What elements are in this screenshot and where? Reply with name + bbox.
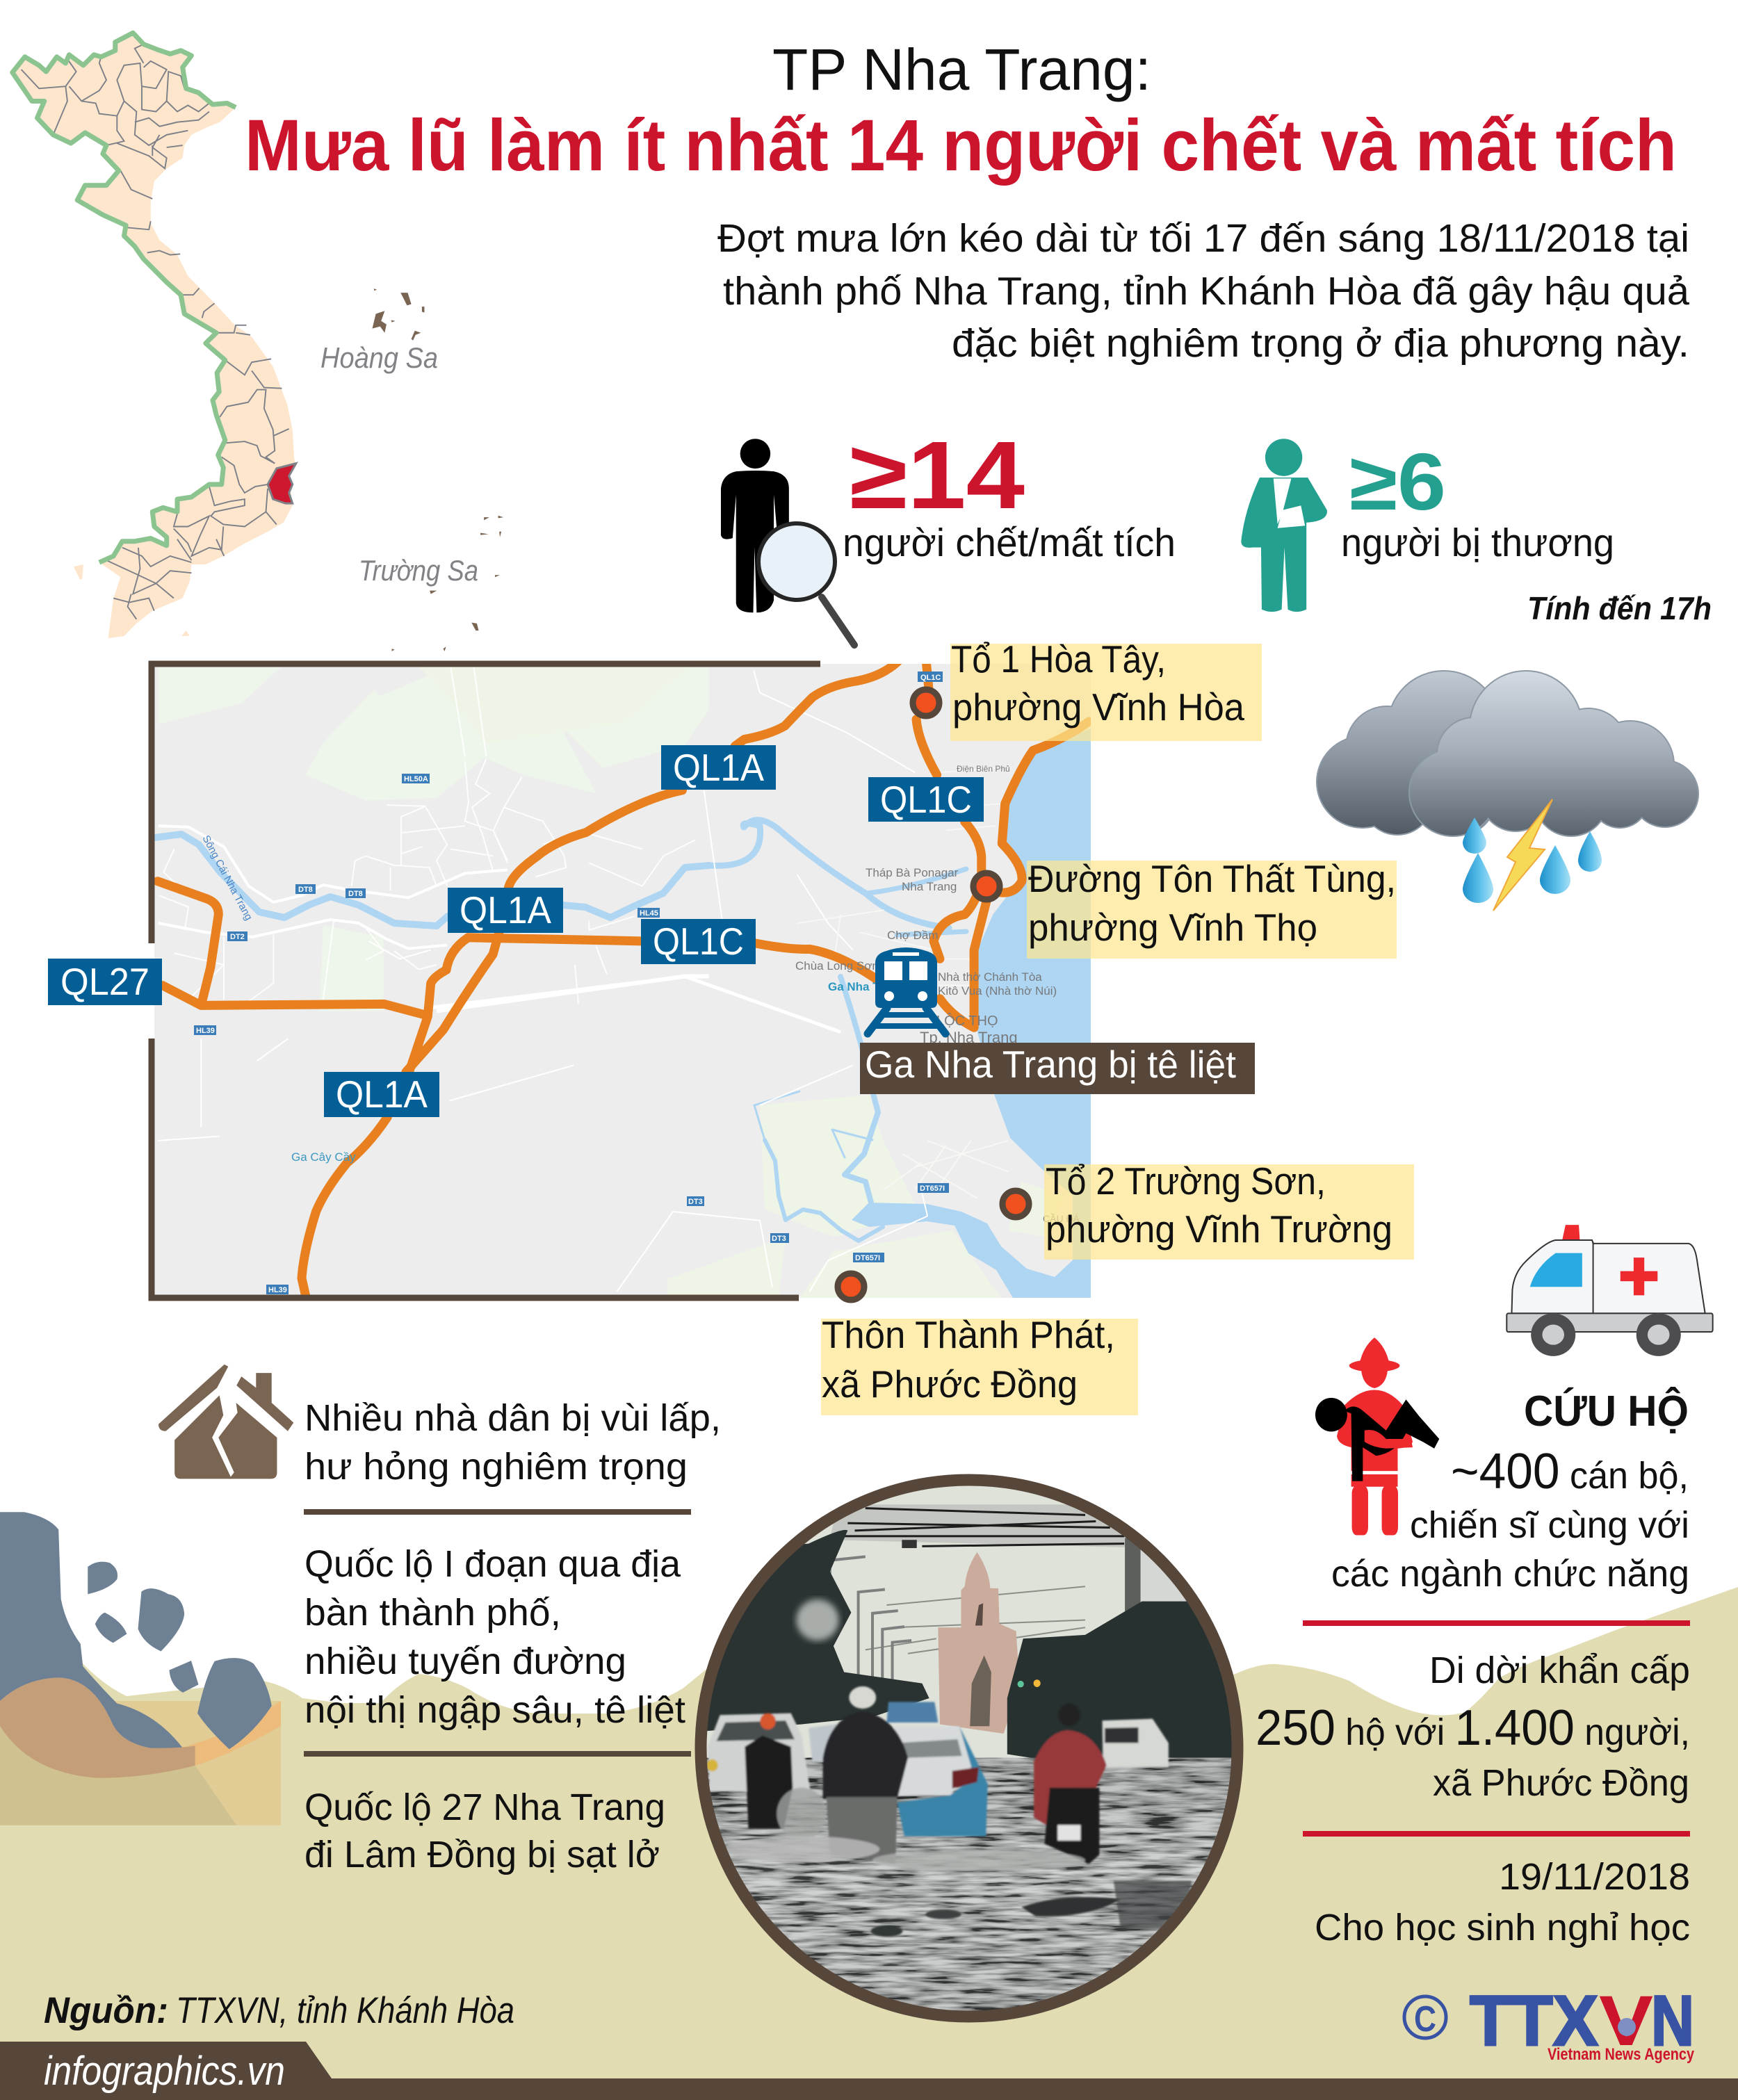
damage: houses: hư hỏng nghiêm trọng	[304, 1446, 688, 1488]
rescue text: chiến sĩ cùng với	[1410, 1504, 1689, 1546]
school closure text: 19/11/2018	[1499, 1856, 1690, 1898]
label: QL1C north: QL1C	[880, 778, 972, 821]
centre rider	[823, 1711, 908, 1799]
icon: firefighter carrying a victim	[1315, 1337, 1439, 1535]
stat: injured: ≥6	[1349, 437, 1446, 527]
damage: landslide: đi Lâm Đồng bị sạt lở	[304, 1834, 660, 1875]
stat: dead or missing	[843, 422, 1176, 565]
tower	[938, 1552, 1020, 1734]
background hill	[0, 1587, 1738, 2100]
callout: Phuoc Dong	[821, 1313, 1138, 1415]
road badges and small labels: Tháp Bà Ponagar	[866, 866, 959, 879]
Truong Sa islands	[392, 516, 503, 651]
damage: roads: bàn thành phố,	[304, 1592, 561, 1634]
road badges and small labels: Sông Cái Nha Trang	[200, 833, 254, 922]
evacuation text	[1256, 1650, 1690, 1804]
pin: Vinh Hoa	[913, 690, 939, 716]
label: QL1A north: QL1A	[673, 746, 764, 789]
label: QL27: QL27	[60, 960, 149, 1003]
road badges and small labels: Ga Cây Cầy	[291, 1150, 356, 1164]
road badges and small labels: Chợ Đầm	[887, 929, 939, 942]
rivers	[154, 820, 966, 1241]
source: TTXVN, tỉnh Khánh Hòa	[176, 1990, 514, 2031]
icon: ambulance	[1506, 1225, 1713, 1356]
damage: roads: nhiều tuyến đường	[304, 1641, 626, 1682]
road badges and small labels: Tp. Nha Trang	[920, 1029, 1018, 1046]
front cloud	[1410, 671, 1698, 836]
wires	[830, 1504, 1126, 1547]
road badges and small labels: Kitô Vua (Nhà thờ Núi)	[938, 984, 1057, 998]
pin: Vinh Truong	[1002, 1191, 1029, 1217]
pin: Phuoc Dong	[838, 1273, 864, 1300]
road badges and small labels: DT657I	[855, 1254, 880, 1262]
website: infographics.vn	[44, 2049, 285, 2094]
logo: TTXVN: Vietnam News Agency	[1548, 2045, 1695, 2064]
road badges and small labels: Điện Biên Phủ	[957, 764, 1010, 774]
road badges and small labels: Chùa Long Sơn	[795, 959, 879, 972]
evacuation text: 250 hộ với 1.400 người,	[1256, 1700, 1690, 1756]
stat: dead or missing: người chết/mất tích	[843, 521, 1176, 565]
damage: houses: Nhiều nhà dân bị vùi lấp,	[304, 1397, 721, 1439]
icon: storm cloud	[1317, 671, 1698, 911]
road badges and small labels: LỘC THỌ	[936, 1013, 998, 1029]
road badges and small labels: DT2	[230, 933, 245, 941]
lightning bolt	[1493, 799, 1552, 911]
sea	[852, 729, 1091, 1298]
title line 1: TP Nha Trang:	[772, 37, 1151, 102]
icon: injured person	[1241, 439, 1327, 612]
white streets	[158, 671, 1008, 1292]
label: Truong Sa: Trường Sa	[359, 554, 478, 587]
rescue text: các ngành chức năng	[1331, 1553, 1689, 1595]
rescue text	[1331, 1444, 1689, 1595]
damage: roads: Quốc lộ I đoạn qua địa	[304, 1543, 681, 1585]
damage: roads: nội thị ngập sâu, tê liệt	[304, 1689, 685, 1731]
stat: injured	[1341, 437, 1614, 565]
school closure text: Cho học sinh nghỉ học	[1315, 1907, 1690, 1948]
islands near coast	[74, 564, 190, 636]
left rider	[745, 1736, 793, 1829]
evacuation text: Di dời khẩn cấp	[1429, 1650, 1690, 1691]
label: Ga Nha Trang: Ga Nha Trang bị tê liệt	[865, 1043, 1236, 1086]
icon: train	[868, 947, 945, 1034]
title line 2: Mưa lũ làm ít nhất 14 người chết và mất tích	[245, 105, 1677, 186]
Hoang Sa islands	[373, 288, 424, 341]
road badges and small labels: Ga Nha Trang	[828, 980, 905, 993]
trees left	[695, 1530, 929, 1732]
callout: Ton That Tung: phường Vĩnh Thọ	[1028, 906, 1317, 949]
intro text	[717, 216, 1689, 366]
photo ring	[701, 1480, 1237, 2017]
intro text: đặc biệt nghiêm trọng ở địa phương này.	[952, 321, 1689, 366]
back cloud	[1317, 671, 1500, 834]
logo: copyright mark	[1404, 1996, 1446, 2040]
road badges and small labels: DT3	[772, 1235, 786, 1243]
callout: Ton That Tung	[1027, 857, 1397, 959]
road badges and small labels: Nha Trang	[902, 880, 957, 893]
label: QL1C centre: QL1C	[653, 920, 744, 963]
callout: Truong Son: Tổ 2 Trường Sơn,	[1046, 1159, 1326, 1203]
road badges and small labels: CẦU ĐÁ	[1043, 1213, 1080, 1224]
roads	[158, 662, 1089, 1301]
callout: Phuoc Dong: xã Phước Đồng	[822, 1362, 1078, 1406]
panel: damage list	[304, 1397, 721, 1875]
photo: flooded street	[695, 1460, 1251, 2044]
road badges and small labels: DT8	[298, 886, 313, 894]
panel: flood map	[48, 637, 1414, 1415]
green areas south	[417, 664, 1064, 1298]
label: QL1A south: QL1A	[336, 1073, 428, 1116]
label: Hoang Sa: Hoàng Sa	[320, 341, 438, 374]
callout: Truong Son: phường Vĩnh Trường	[1046, 1207, 1392, 1251]
logo: TTXVN: TTX	[1470, 1981, 1598, 2060]
road badges and small labels: HL39	[268, 1286, 287, 1294]
road badges and small labels: DT3	[688, 1198, 703, 1206]
panel: rescue	[1256, 1387, 1690, 1948]
illustration: landslide rocks	[0, 1512, 281, 1825]
source	[44, 1990, 514, 2031]
province boundaries	[22, 44, 289, 619]
logo: TTXVN	[1470, 1981, 1695, 2064]
road badges and small labels: QL1C	[920, 674, 941, 682]
road badges and small labels: DT657I	[920, 1185, 945, 1193]
logo: TTXVN: V	[1599, 1981, 1653, 2060]
map of Vietnam	[13, 33, 503, 651]
time note: Tính đến 17h	[1527, 590, 1712, 626]
right rider	[1034, 1730, 1107, 1825]
callout: Hoa Tay: Tổ 1 Hòa Tây,	[951, 637, 1166, 681]
road badges and small labels: DT8	[348, 890, 363, 898]
callout: Hoa Tay	[950, 637, 1262, 741]
raindrops	[1463, 817, 1602, 903]
callout: Ton That Tung: Đường Tôn Thất Tùng,	[1028, 857, 1396, 900]
damage: landslide: Quốc lộ 27 Nha Trang	[304, 1786, 665, 1828]
intro text: Đợt mưa lớn kéo dài từ tối 17 đến sáng 18/11/2018 tại	[717, 216, 1689, 261]
stat: injured: người bị thương	[1341, 521, 1614, 565]
van	[1102, 1719, 1169, 1767]
source: Nguồn:	[44, 1990, 168, 2031]
road badges and small labels: HL45	[640, 909, 658, 918]
heading: CỨU HỘ	[1524, 1387, 1689, 1435]
highlighted Khanh Hoa province	[268, 464, 296, 503]
trees right	[1007, 1602, 1232, 1758]
callout: Hoa Tay: phường Vĩnh Hòa	[952, 685, 1244, 729]
damage: roads	[304, 1543, 685, 1731]
bottom strip	[0, 2042, 1738, 2100]
evacuation text: xã Phước Đồng	[1433, 1762, 1689, 1804]
damage: landslide	[304, 1786, 665, 1875]
taxi	[886, 1702, 938, 1723]
school closure text	[1315, 1856, 1690, 1948]
white car	[708, 1713, 811, 1791]
green areas north	[159, 667, 709, 1011]
road badges and small labels: Nhà thờ Chánh Tòa	[938, 970, 1042, 984]
splashes	[777, 1788, 827, 1840]
callout: Phuoc Dong: Thôn Thành Phát,	[822, 1313, 1115, 1356]
water	[706, 1757, 1232, 2010]
logo: copyright mark: C	[1414, 1999, 1436, 2040]
border with neighbours	[13, 33, 236, 562]
lamp posts	[830, 1556, 911, 1679]
intro text: thành phố Nha Trang, tỉnh Khánh Hòa đã gây hậu quả	[723, 269, 1689, 314]
map frame	[152, 664, 820, 1298]
map background	[154, 664, 1091, 1298]
callout: Truong Son	[1044, 1159, 1414, 1260]
road badges and small labels	[194, 671, 1080, 1294]
icon: person with magnifier	[721, 439, 854, 645]
stat: dead or missing: ≥14	[850, 422, 1025, 529]
icon: broken house	[159, 1365, 293, 1479]
damage: houses	[304, 1397, 721, 1488]
buildings	[1140, 1550, 1186, 1602]
rescue text: ~400 cán bộ,	[1451, 1444, 1689, 1499]
road badges and small labels: HL39	[196, 1027, 215, 1035]
pin: Vinh Tho	[973, 873, 1000, 900]
title	[245, 37, 1677, 186]
logo: TTXVN: N	[1651, 1981, 1694, 2060]
label: QL1A centre: QL1A	[460, 888, 551, 931]
country shape	[13, 33, 296, 638]
west streets	[159, 667, 709, 1011]
water texture	[706, 1757, 1232, 2010]
road badges and small labels: HL50A	[404, 775, 428, 783]
